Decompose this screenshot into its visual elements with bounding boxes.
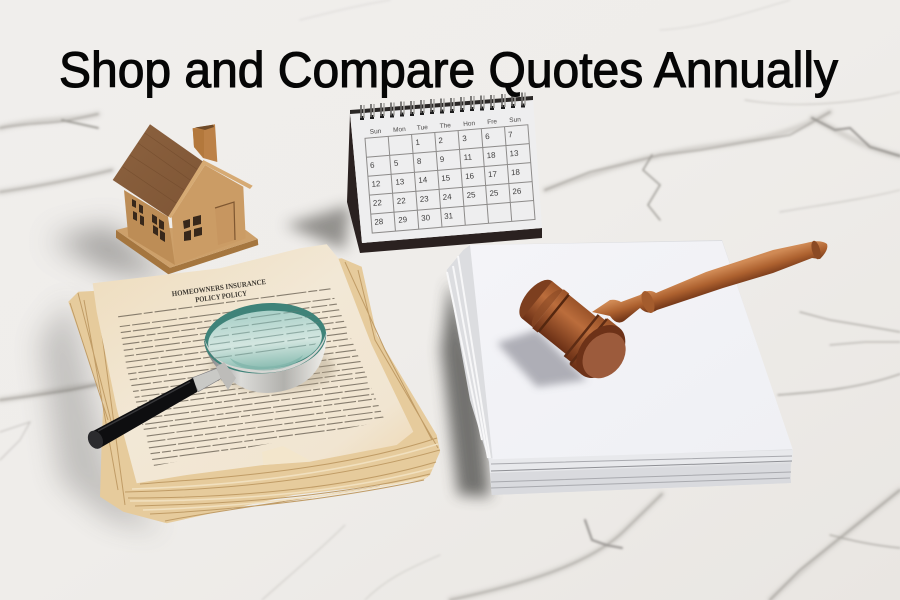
calendar dates: 2 (438, 136, 444, 145)
calendar dates: 9 (439, 155, 445, 164)
lens collar (216, 362, 236, 390)
icon: wooden house model (113, 124, 258, 274)
chimney (193, 124, 217, 162)
ferrule (192, 368, 222, 392)
calendar dates: 7 (508, 130, 513, 139)
weekday labels (370, 116, 521, 136)
document text lines (118, 288, 384, 466)
magnifier rim (204, 332, 327, 393)
calendar dates: 13 (395, 177, 405, 187)
gavel shadow (497, 330, 587, 387)
calendar grid (364, 116, 535, 233)
calendar dates: 14 (418, 175, 428, 185)
handle end knob (810, 240, 822, 260)
calendar dates: 6 (485, 132, 491, 141)
weekday labels: Hon (463, 120, 476, 128)
calendar dates: 29 (398, 215, 408, 225)
calendar dates: 12 (371, 179, 381, 189)
gavel head (509, 269, 638, 390)
calendar (347, 92, 542, 253)
calendar dates: 30 (421, 213, 431, 223)
calendar dates: 5 (394, 159, 399, 168)
calendar dates: 28 (374, 217, 384, 227)
document heading: HOMEOWNERS INSURANCE (171, 277, 267, 298)
calendar dates: 6 (370, 161, 375, 170)
gavel (509, 240, 827, 390)
calendar dates: 8 (417, 157, 422, 166)
roof (113, 124, 253, 218)
weekday labels: Mon (393, 126, 406, 134)
magnifying glass (85, 298, 334, 451)
lens (208, 310, 322, 370)
calendar dates: 26 (512, 186, 522, 196)
spiral rings (361, 92, 525, 120)
binding bar (350, 96, 533, 114)
calendar dates: 3 (462, 134, 468, 143)
document stack with magnifying glass (62, 244, 440, 523)
top sheet (470, 241, 793, 459)
handle collar (639, 289, 657, 315)
magnifier shadow (210, 344, 334, 392)
calendar dates: 31 (444, 211, 454, 221)
gavel face (574, 324, 635, 387)
weekday labels: Sun (509, 116, 521, 124)
weekday labels: Tue (417, 124, 428, 132)
white paper stack with gavel (447, 240, 827, 495)
weekday labels: The (439, 122, 452, 130)
calendar stand (347, 113, 542, 253)
calendar dates: 25 (466, 190, 476, 200)
calendar dates: 22 (373, 198, 383, 208)
windows (132, 199, 202, 242)
handle (85, 378, 198, 451)
calendar dates: 18 (486, 150, 496, 160)
top document page (93, 244, 413, 483)
door (215, 202, 235, 245)
document heading (171, 277, 268, 307)
calendar dates: 18 (511, 168, 521, 177)
calendar dates: 25 (489, 188, 499, 198)
calendar dates: 23 (419, 194, 430, 204)
house right wall (172, 165, 246, 265)
calendar dates: 1 (415, 138, 421, 147)
weekday labels: Fre (487, 118, 498, 126)
title: Shop and Compare Quotes Annually (59, 42, 838, 98)
shadows on marble (40, 300, 160, 530)
calendar dates: 24 (442, 192, 452, 202)
calendar dates: 17 (488, 169, 498, 179)
calendar dates: 13 (509, 149, 519, 158)
page fold (262, 446, 311, 465)
weekday labels: Sun (370, 128, 382, 136)
calendar dates: 16 (465, 171, 475, 181)
house base (116, 227, 258, 274)
calendar dates: 22 (397, 196, 407, 206)
stacked sheets (447, 240, 793, 495)
house left wall (124, 190, 175, 265)
gavel handle (592, 241, 827, 323)
calendar page (350, 99, 542, 243)
calendar dates: 11 (463, 152, 473, 162)
document heading: POLICY POLICY (195, 288, 248, 304)
calendar dates (368, 130, 524, 227)
lower aged pages (68, 258, 440, 523)
calendar dates: 15 (441, 173, 451, 183)
